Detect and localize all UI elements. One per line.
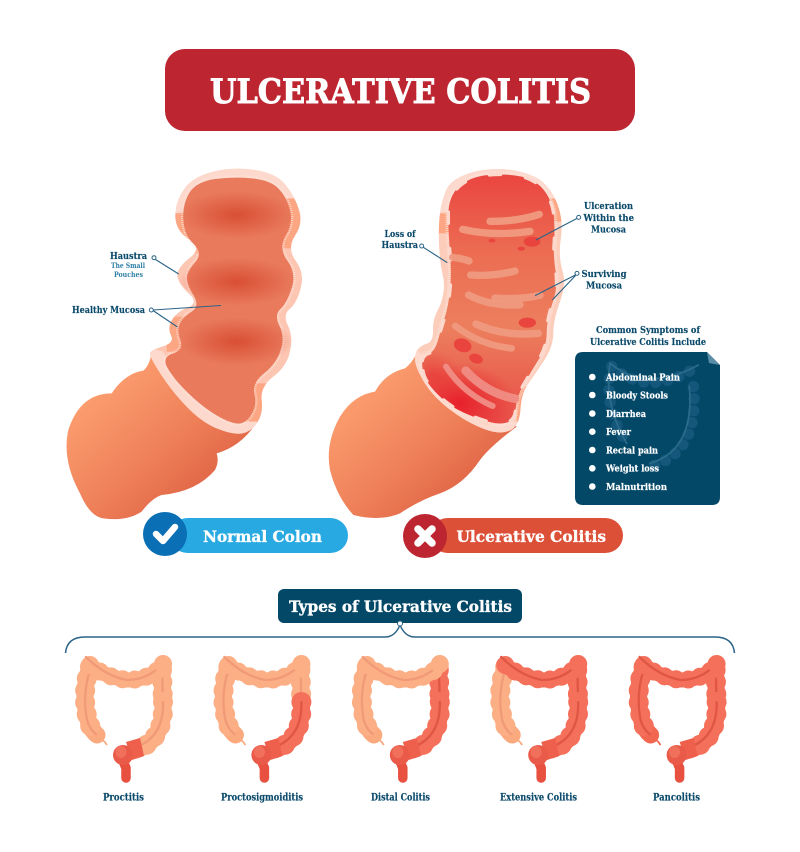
colon type: Distal Colitis — [362, 655, 449, 778]
colon outer body — [329, 353, 517, 518]
colon outer body — [67, 352, 255, 519]
title banner — [165, 49, 635, 131]
symptoms heading: Common Symptoms of — [596, 325, 701, 336]
colon wall — [150, 168, 302, 434]
label: Ulceration Within the Mucosa: Ulceration — [584, 201, 633, 212]
label: Ulceration Within the Mucosa: Within the — [583, 213, 634, 224]
symptoms heading: Ulcerative Colitis Include — [590, 337, 706, 348]
colon type: Pancolitis — [639, 655, 726, 778]
title: ULCERATIVE COLITIS — [210, 72, 591, 112]
colon type labels: Extensive Colitis — [500, 792, 577, 804]
heading: types of ulcerative colitis — [278, 589, 522, 623]
label: Loss of Haustra — [382, 229, 418, 251]
labels: normal colon callouts — [72, 251, 221, 327]
colon type labels — [103, 792, 700, 804]
colon type labels: Proctosigmoiditis — [221, 792, 303, 804]
ulcers — [452, 237, 540, 365]
healthy mucosa — [165, 178, 293, 424]
label: Surviving Mucosa: Mucosa — [586, 280, 622, 292]
ragged mucosa edge — [422, 174, 556, 424]
bracket — [66, 621, 734, 653]
symptoms heading — [590, 325, 706, 348]
badge: normal colon: Normal Colon — [203, 527, 322, 546]
icon: check mark — [156, 527, 175, 541]
label: Ulceration Within the Mucosa: Mucosa — [591, 224, 626, 236]
symptom text: Bloody Stools — [606, 390, 668, 402]
label: Healthy Mucosa: Healthy Mucosa — [72, 305, 145, 316]
symptom text: Rectal pain — [606, 446, 658, 456]
colon type: Proctitis — [85, 655, 172, 778]
colon type labels: Pancolitis — [653, 792, 700, 804]
symptom text: Fever — [606, 427, 632, 438]
inflamed mucosa — [422, 174, 556, 424]
illustration: ulcerative colitis colon — [329, 160, 581, 518]
label: Loss of Haustra: Haustra — [382, 240, 418, 251]
colon wall — [415, 169, 564, 432]
badge: ulcerative colitis — [403, 514, 623, 558]
label: Haustra — [110, 251, 179, 279]
label: Loss of Haustra: Loss of — [384, 229, 416, 240]
symptom text — [605, 372, 680, 493]
symptom text: Weight loss — [605, 464, 659, 474]
label: Haustra: The Small — [111, 261, 145, 270]
label: Haustra: Haustra — [110, 251, 147, 262]
colon type: Extensive Colitis — [500, 655, 587, 778]
illustration: normal colon — [67, 160, 313, 519]
panel watermark colon — [609, 363, 698, 467]
colon type labels: Distal Colitis — [371, 792, 430, 804]
icon: cross mark — [418, 529, 432, 543]
callout lines — [420, 215, 581, 300]
surviving mucosa patches — [446, 214, 540, 406]
villi edge — [165, 178, 293, 424]
symptom text: Abdominal Pain — [605, 372, 680, 384]
colon type: Proctosigmoiditis — [223, 655, 310, 778]
label: Ulceration Within the Mucosa — [583, 201, 634, 236]
symptom text: Diarrhea — [606, 409, 646, 420]
label: Haustra: Pouches — [114, 270, 143, 279]
symptom text: Malnutrition — [606, 482, 667, 493]
badge: ulcerative colitis: Ulcerative Colitis — [456, 527, 606, 546]
villi edge — [422, 174, 556, 424]
colon type labels: Proctitis — [103, 792, 144, 804]
badge: normal colon — [143, 512, 348, 556]
panel: symptoms list — [575, 352, 720, 505]
symptom bullets — [589, 374, 596, 490]
heading: types of ulcerative colitis: Types of Ulcerative Colitis — [289, 597, 512, 616]
mucosa red folds — [178, 191, 295, 366]
label: Healthy Mucosa — [72, 305, 221, 327]
label: Surviving Mucosa: Surviving — [582, 269, 627, 280]
label: Surviving Mucosa — [582, 269, 627, 292]
